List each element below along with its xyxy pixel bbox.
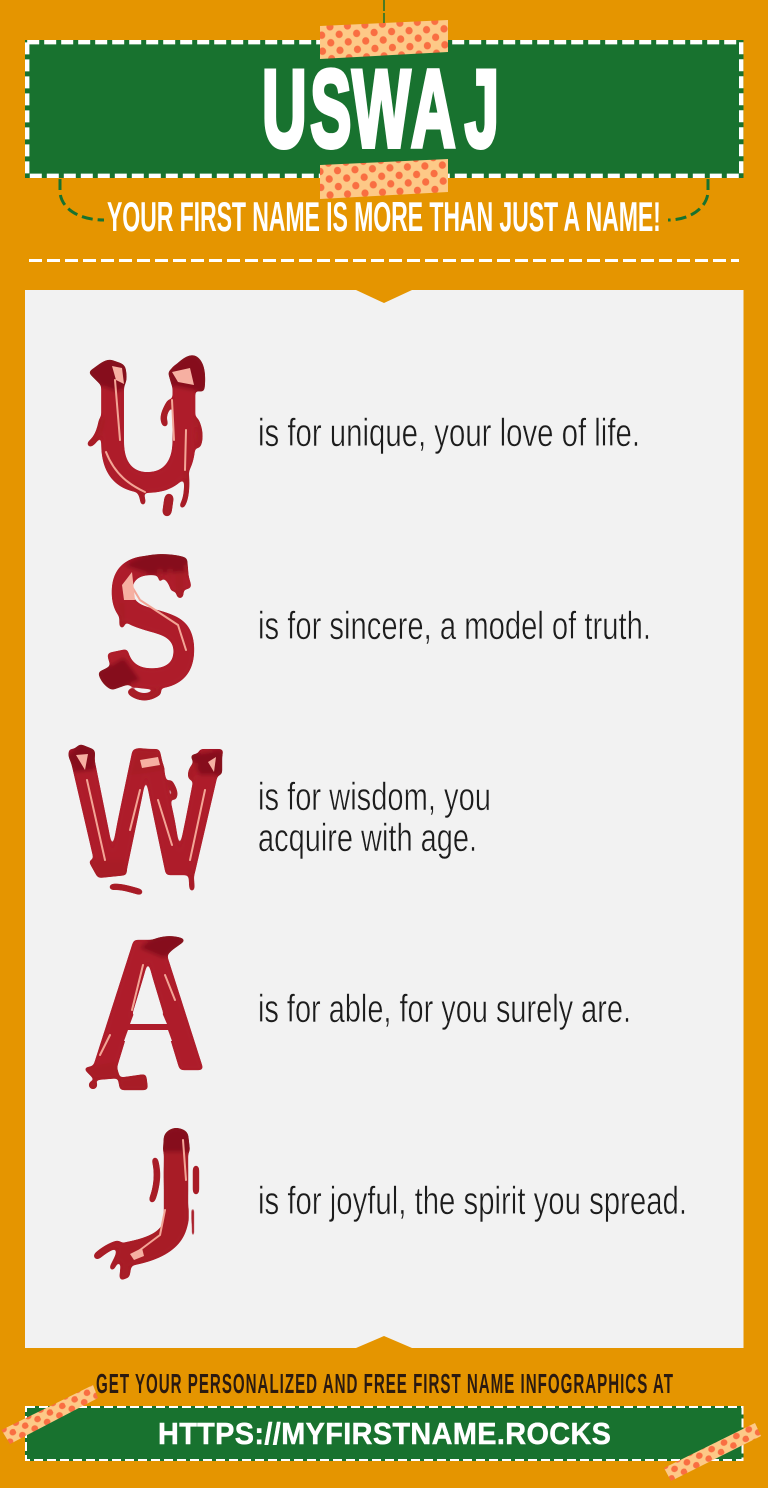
tape: footer right: [664, 1423, 761, 1481]
main paper panel: [25, 290, 744, 1348]
letter J: [97, 1128, 196, 1278]
subtitle: YOUR FIRST NAME IS MORE THAN JUST A NAME!: [107, 194, 661, 241]
right connector curve: [668, 179, 708, 220]
lower opening of A: [124, 1030, 172, 1041]
hanging string: [383, 0, 385, 24]
row: U: [88, 327, 640, 530]
caption W line 2: acquire with age.: [258, 817, 477, 860]
letter U: U: [92, 327, 205, 530]
caption U: is for unique, your love of life.: [258, 412, 640, 455]
title banner: [25, 40, 744, 178]
row: S: [98, 517, 651, 727]
caption A: is for able, for you surely are.: [258, 988, 631, 1031]
title: USWAJ: [262, 47, 499, 170]
row: J: [97, 1128, 687, 1278]
row: W: [68, 709, 491, 914]
row: A: [83, 899, 631, 1110]
caption W: is for wisdom, you: [258, 776, 491, 819]
tape: footer left: [2, 1385, 98, 1444]
footer prompt: GET YOUR PERSONALIZED AND FREE FIRST NAME INFOGRAPHICS AT: [96, 1368, 673, 1399]
caption S: is for sincere, a model of truth.: [258, 605, 651, 648]
letter S: S: [103, 517, 200, 727]
dashed divider: [29, 259, 739, 262]
letter W: W: [68, 709, 224, 914]
counter of A: [130, 978, 167, 1024]
footer banner: [25, 1406, 744, 1461]
tape: banner bottom: [320, 159, 448, 199]
letter A: A: [88, 899, 208, 1110]
tape: banner top: [320, 20, 448, 59]
url: HTTPS://MYFIRSTNAME.ROCKS: [158, 1417, 611, 1451]
left connector curve: [60, 179, 104, 220]
